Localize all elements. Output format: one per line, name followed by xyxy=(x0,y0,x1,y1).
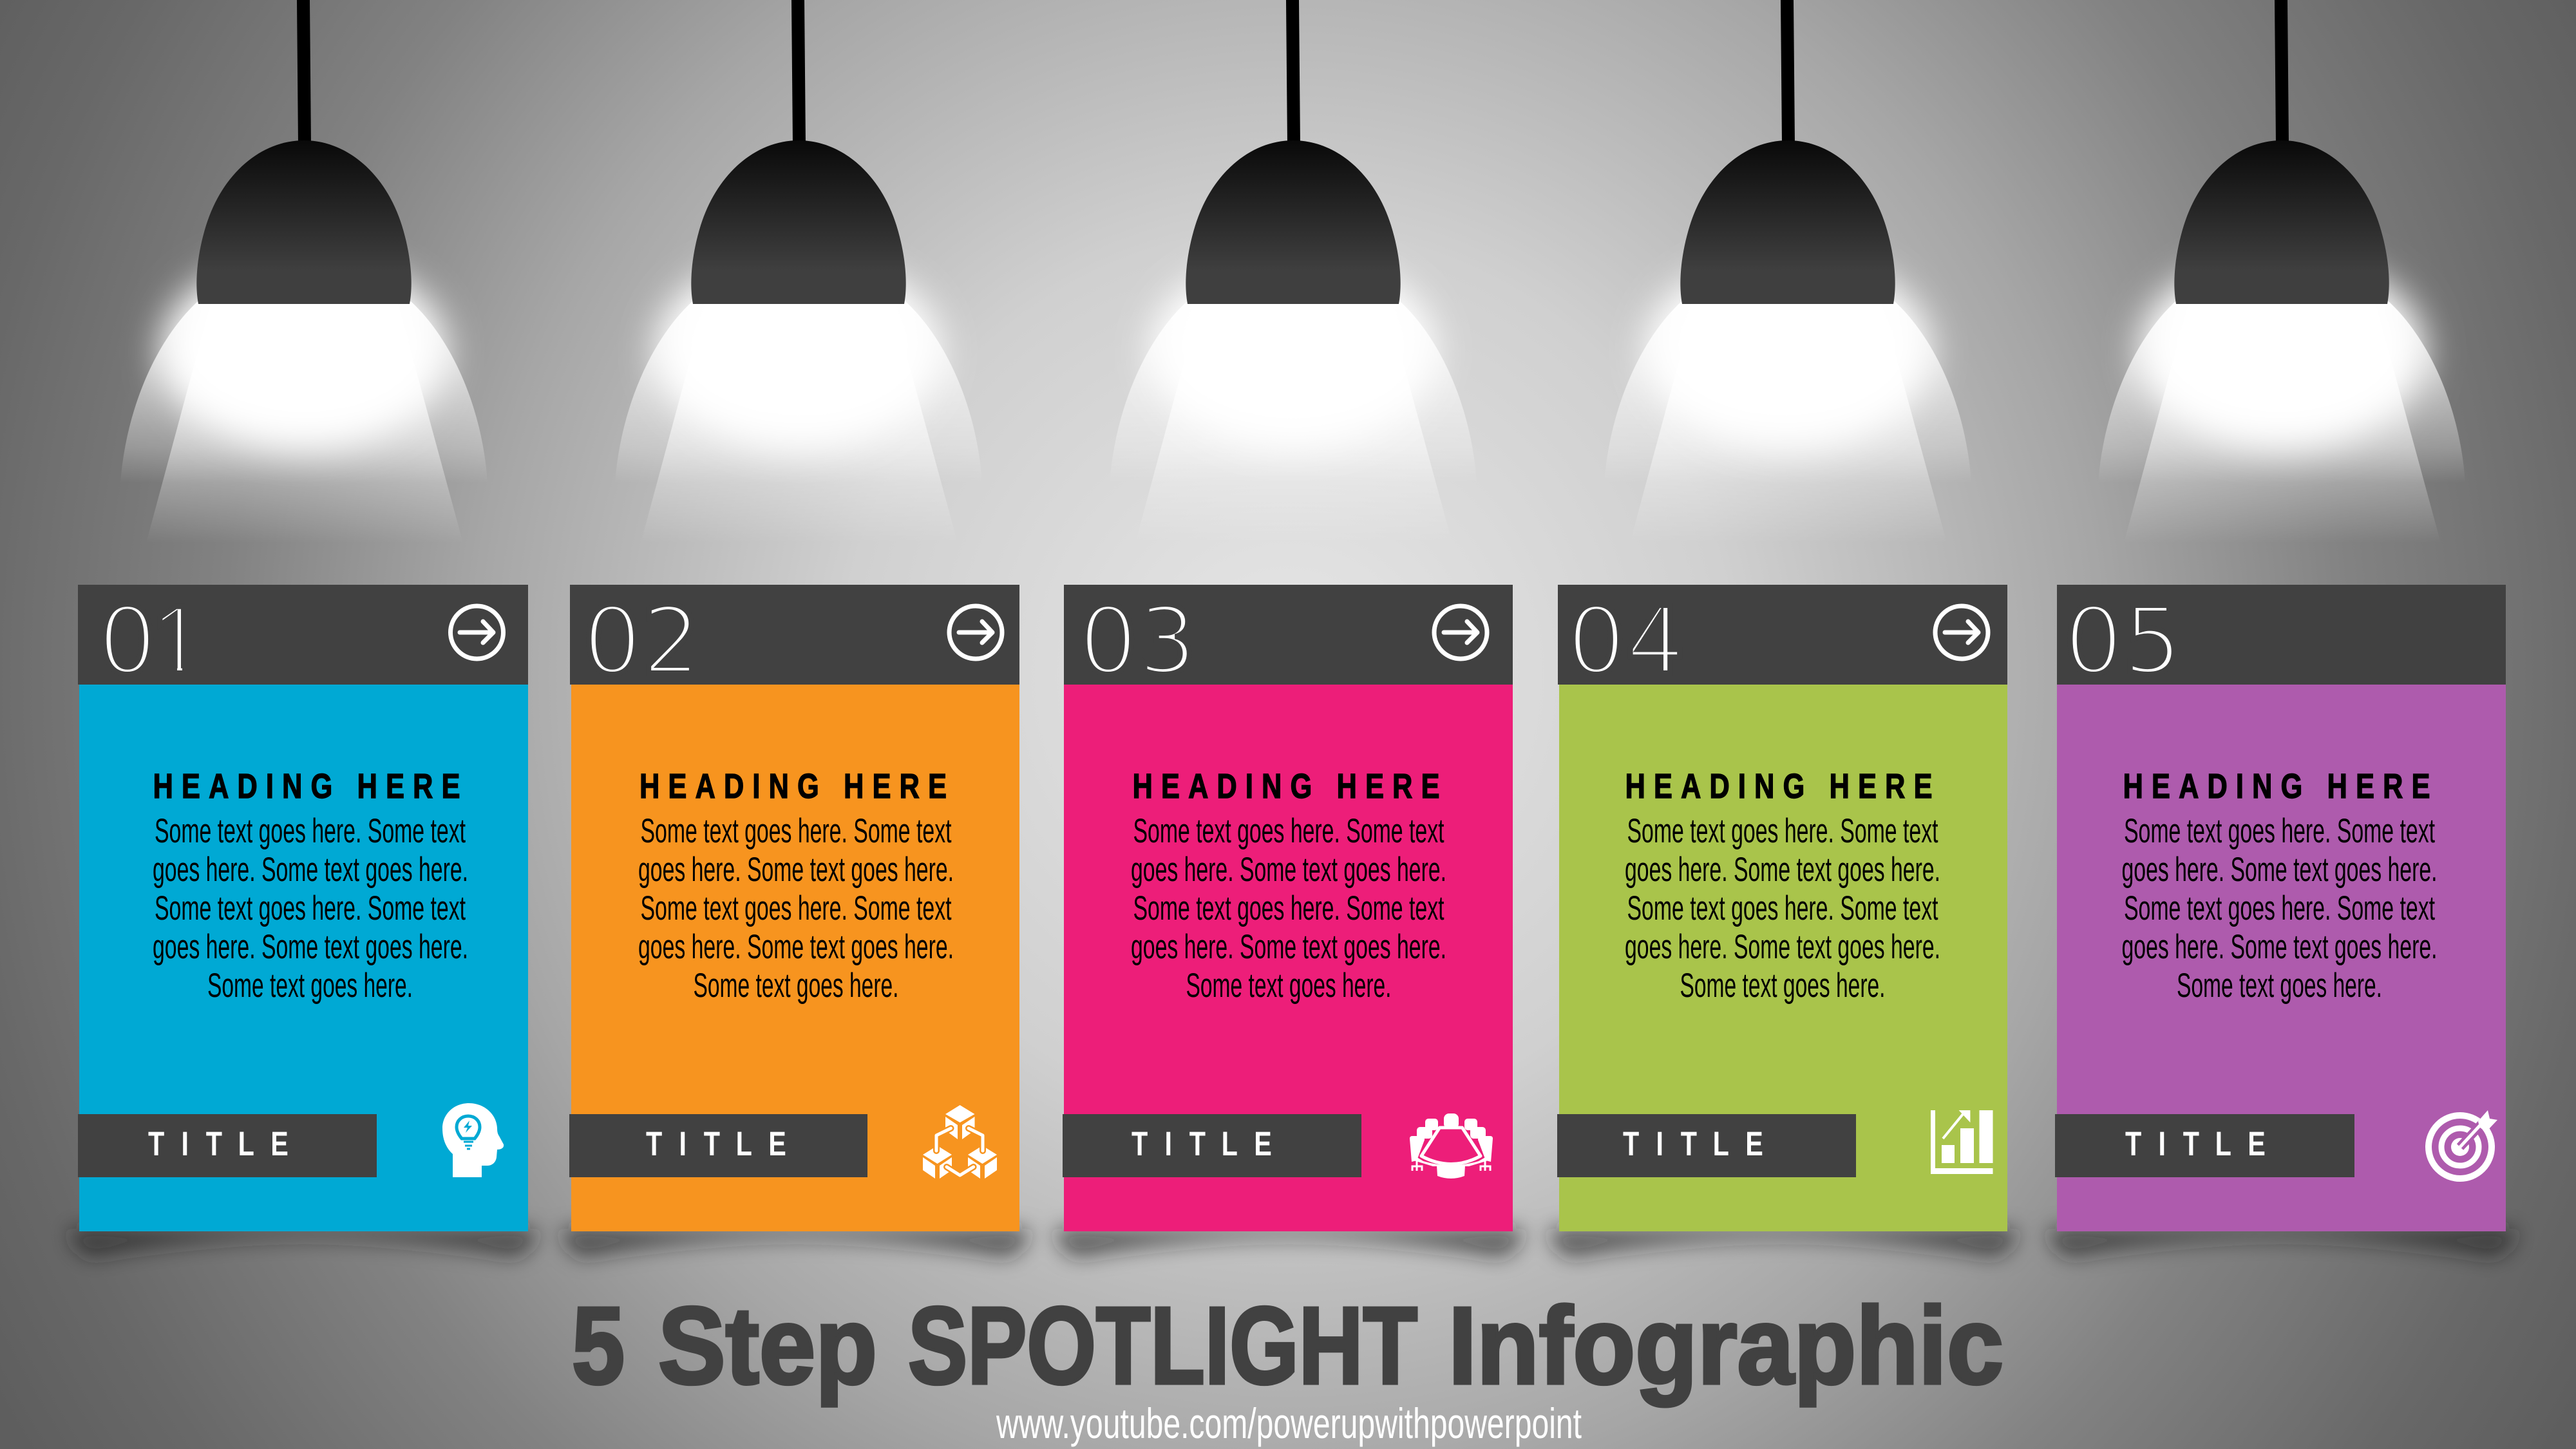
number 03: 03 xyxy=(1079,587,1197,695)
number 05: 05 xyxy=(2064,587,2182,695)
url caption: www.youtube.com/powerupwithpowerpoint xyxy=(996,1399,1582,1447)
body text 04: Some text goes here. Some text xyxy=(1627,812,1938,850)
card body 04 xyxy=(1559,683,2007,1231)
body text 01: goes here. Some text goes here. xyxy=(153,851,468,889)
body text 04: Some text goes here. xyxy=(1680,967,1886,1005)
title: 5 xyxy=(572,1285,625,1407)
body text 04: goes here. Some text goes here. xyxy=(1625,928,1940,966)
header bar 01 xyxy=(78,585,528,685)
body text 01: Some text goes here. Some text xyxy=(155,812,466,850)
title bar 01 xyxy=(78,1114,377,1177)
number 04: 04 xyxy=(1567,587,1685,695)
icon: arrow circle 01 xyxy=(451,606,504,659)
lamp 2 xyxy=(615,0,982,543)
body text 03 xyxy=(1131,812,1446,1005)
header bar 04 xyxy=(1558,585,2007,685)
body text 02 xyxy=(638,812,954,1005)
body text 03: goes here. Some text goes here. xyxy=(1131,851,1446,889)
title: Step xyxy=(658,1285,877,1407)
title bar 02: TITLE xyxy=(646,1125,786,1163)
lamp 5 xyxy=(2098,0,2465,543)
body text 02: Some text goes here. Some text xyxy=(640,889,952,927)
card body 01 xyxy=(79,683,528,1231)
icon: rising bar chart xyxy=(1931,1110,1993,1174)
body text 01: Some text goes here. xyxy=(207,967,413,1005)
body text 03: goes here. Some text goes here. xyxy=(1131,928,1446,966)
title bar 03: TITLE xyxy=(1132,1125,1272,1163)
panel: step 05 xyxy=(2055,585,2506,1231)
title bar 04 xyxy=(1557,1114,1856,1177)
body text 01: Some text goes here. Some text xyxy=(155,889,466,927)
body text 01: goes here. Some text goes here. xyxy=(153,928,468,966)
body text 02: Some text goes here. Some text xyxy=(640,812,952,850)
number 01: 1 xyxy=(151,585,204,694)
header bar 05 xyxy=(2057,585,2506,685)
title: Infographic xyxy=(1448,1285,2003,1407)
title xyxy=(572,1285,2003,1407)
heading 03: HEADING HERE xyxy=(1133,768,1439,806)
title bar 05 xyxy=(2055,1114,2354,1177)
body text 03: Some text goes here. Some text xyxy=(1133,889,1444,927)
icon: arrow circle 02 xyxy=(949,606,1002,659)
card body 03 xyxy=(1064,683,1513,1231)
body text 03: Some text goes here. xyxy=(1186,967,1391,1005)
icon: linked blocks xyxy=(923,1105,997,1179)
card shadows xyxy=(70,1229,2516,1257)
header bar 02 xyxy=(570,585,1019,685)
icon: arrow circle 04 xyxy=(1935,606,1988,659)
title bar 04: TITLE xyxy=(1623,1125,1763,1163)
icon: head with light bulb xyxy=(442,1103,504,1177)
body text 02: goes here. Some text goes here. xyxy=(638,851,954,889)
panel: step 04 xyxy=(1557,585,2007,1231)
panel: step 02 xyxy=(569,585,1019,1231)
title bar 03 xyxy=(1063,1114,1361,1177)
number 01 xyxy=(98,585,209,695)
body text 04 xyxy=(1625,812,1940,1005)
title: SPOTLIGHT xyxy=(908,1285,1417,1407)
title bar 05: TITLE xyxy=(2125,1125,2266,1163)
lamp 4 xyxy=(1604,0,1971,543)
title bar 02 xyxy=(569,1114,867,1177)
lamp 3 xyxy=(1110,0,1477,543)
panel: step 03 xyxy=(1063,585,1513,1231)
heading 05: HEADING HERE xyxy=(2123,768,2430,806)
body text 02: goes here. Some text goes here. xyxy=(638,928,954,966)
title bar 01: TITLE xyxy=(148,1125,289,1163)
panel: step 01 xyxy=(78,585,528,1231)
icon: target with arrow xyxy=(2429,1110,2497,1179)
body text 04: goes here. Some text goes here. xyxy=(1625,851,1940,889)
body text 05: Some text goes here. xyxy=(2177,967,2382,1005)
number 02: 02 xyxy=(583,587,701,695)
number 01: 0 xyxy=(98,587,157,695)
card body 05 xyxy=(2057,683,2506,1231)
card body 02 xyxy=(571,683,1019,1231)
lamp 1 xyxy=(120,0,488,543)
body text 04: Some text goes here. Some text xyxy=(1627,889,1938,927)
heading 02: HEADING HERE xyxy=(639,768,947,806)
heading 04: HEADING HERE xyxy=(1625,768,1932,806)
body text 05 xyxy=(2121,812,2437,1005)
heading 01: HEADING HERE xyxy=(153,768,460,806)
body text 02: Some text goes here. xyxy=(693,967,899,1005)
body text 03: Some text goes here. Some text xyxy=(1133,812,1444,850)
icon: arrow circle 03 xyxy=(1434,606,1487,659)
icon: conference table xyxy=(1410,1113,1493,1179)
header bar 03 xyxy=(1064,585,1513,685)
body text 01 xyxy=(153,812,468,1005)
